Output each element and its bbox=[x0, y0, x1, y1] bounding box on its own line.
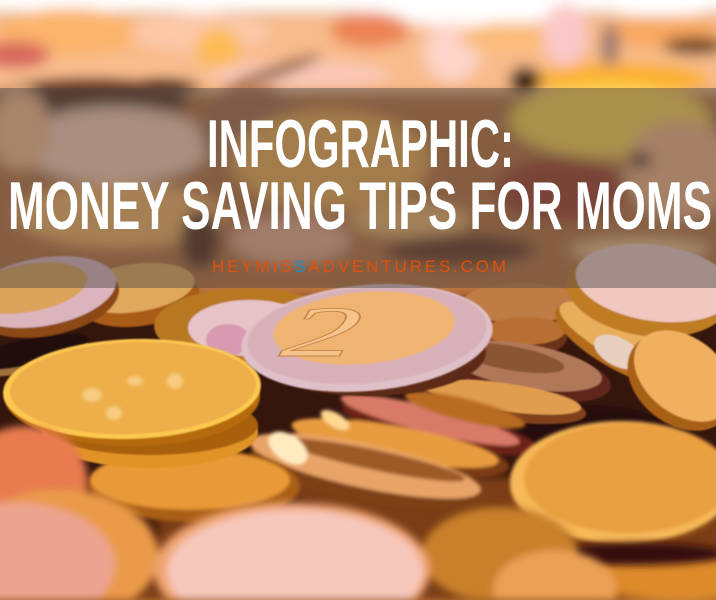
rear coins on the left bbox=[0, 245, 203, 385]
numeral 2 on the coin: 2 bbox=[262, 292, 386, 372]
dark gaps between the coins bbox=[0, 298, 716, 600]
right-hand coins bbox=[421, 234, 716, 451]
dark shadow below the large coin bbox=[555, 543, 716, 565]
rear coin with silver centre bbox=[154, 288, 342, 364]
blurred foreground coins bbox=[0, 426, 617, 600]
large gold coin right bbox=[510, 421, 716, 548]
blurred coins along the top bbox=[0, 0, 716, 104]
left gold coin stack bbox=[1, 335, 300, 522]
blurred coins behind the band bbox=[0, 80, 716, 295]
website credit: HEYMISSADVENTURES.COM bbox=[212, 257, 506, 276]
centre stack of leaning coins bbox=[245, 384, 542, 523]
two euro coin bbox=[237, 274, 497, 402]
title line 1: INFOGRAPHIC: bbox=[207, 106, 514, 182]
translucent title band bbox=[0, 88, 716, 288]
